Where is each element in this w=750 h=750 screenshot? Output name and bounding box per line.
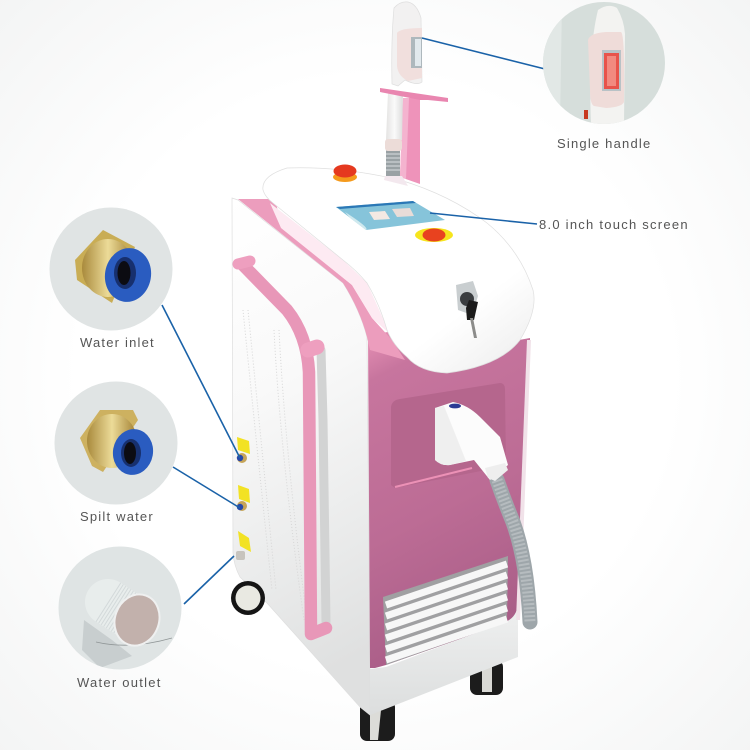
inset: water outlet [58, 546, 182, 670]
touch screen [336, 201, 445, 230]
base [370, 605, 518, 715]
side pink grip [238, 261, 326, 634]
hose collar on cover [384, 176, 408, 186]
label: split water: Spilt water [80, 509, 154, 524]
holster lower edge [395, 468, 472, 487]
label: touch screen: 8.0 inch touch screen [539, 217, 689, 232]
side panel [232, 198, 370, 715]
perforation pattern [243, 310, 307, 620]
port labels and fittings [236, 437, 251, 560]
handpiece post and bracket [400, 98, 420, 184]
left caster [231, 581, 265, 615]
inset: split water [54, 381, 178, 505]
front mauve panel [368, 332, 530, 668]
leader lines [162, 38, 545, 604]
holstered handpiece [435, 402, 508, 481]
yellow start button [415, 228, 453, 242]
light inner recess [270, 203, 390, 334]
inset: water inlet [49, 207, 173, 331]
front caster [360, 700, 395, 741]
label: water inlet: Water inlet [80, 335, 155, 350]
handpiece body [380, 2, 448, 151]
hose [497, 480, 530, 622]
vent grille [383, 556, 508, 665]
grey hose under handpiece [386, 150, 400, 176]
holster [391, 383, 506, 488]
label: water outlet: Water outlet [77, 675, 162, 690]
pink band [238, 199, 405, 360]
rear casters [470, 660, 503, 695]
machine [231, 2, 534, 741]
emergency stop button [333, 164, 357, 182]
top cover [263, 168, 534, 373]
label: single handle: Single handle [557, 136, 651, 151]
right white edge [516, 340, 531, 620]
key switch [456, 281, 478, 338]
inset: single handle [543, 2, 665, 124]
